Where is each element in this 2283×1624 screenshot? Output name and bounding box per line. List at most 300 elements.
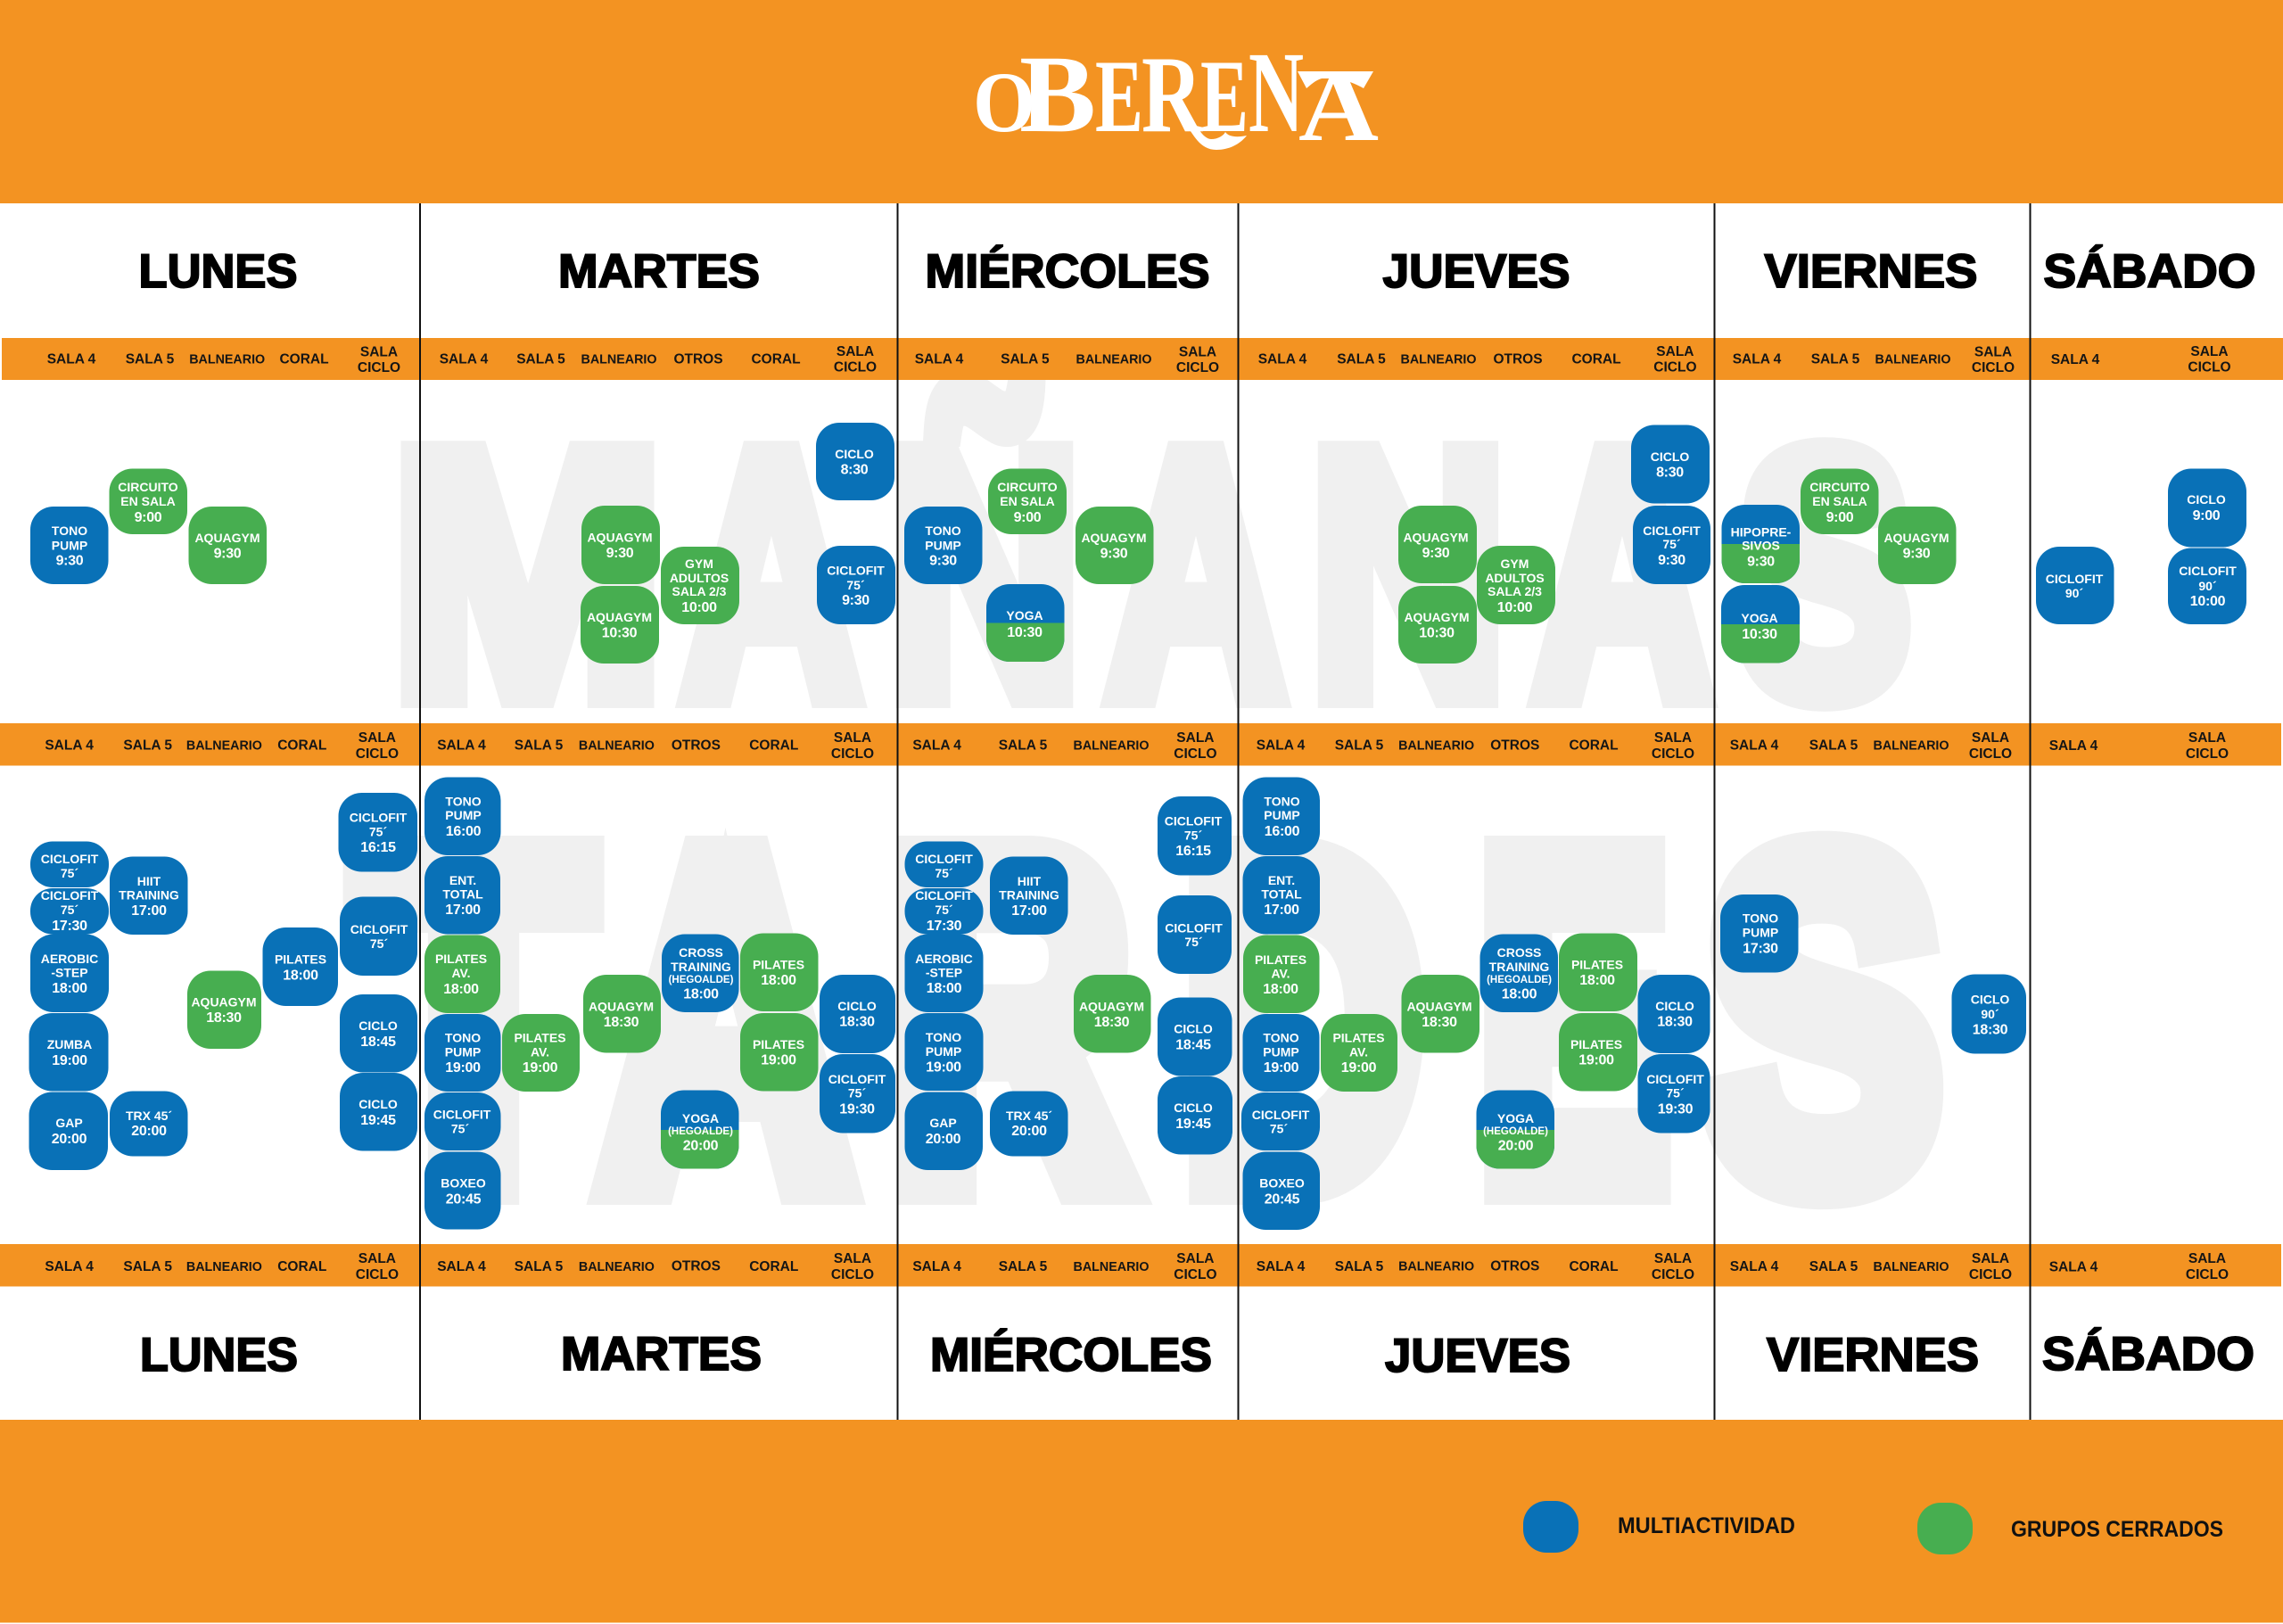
class: ciclofit 75 16:15 bbox=[1158, 796, 1232, 876]
room bar: bottom: CICLO bbox=[1652, 1267, 1694, 1282]
class: ciclofit 90 10:00: 10:00 bbox=[2190, 594, 2226, 609]
room bar: morning: OTROS bbox=[673, 351, 723, 367]
class: cross training 18:00: (HEGOALDE) bbox=[669, 975, 734, 985]
class: aquagym 9:30: AQUAGYM bbox=[1403, 530, 1469, 544]
room bar: afternoon: BALNEARIO bbox=[186, 738, 262, 753]
class: yoga hegoalde 20:00 bbox=[661, 1090, 738, 1168]
room bar: afternoon: CORAL bbox=[749, 738, 798, 753]
class: aerobic step 18:00 bbox=[30, 935, 109, 1012]
room bar: afternoon: CICLO bbox=[1174, 746, 1217, 762]
class: pilates av. 19:00 bbox=[1321, 1014, 1397, 1092]
panel: lunes classes bbox=[29, 469, 417, 1170]
class: tono pump 9:30: 9:30 bbox=[56, 553, 84, 569]
class: ciclo 9:00: 9:00 bbox=[2193, 508, 2221, 523]
class: aerobic step 18:00: AEROBIC bbox=[915, 952, 973, 966]
class: gym adultos 10:00: SALA 2/3 bbox=[1488, 584, 1542, 598]
room bar: morning: SALA 5 bbox=[1337, 351, 1386, 367]
class: ciclofit 75 19:30: CICLOFIT bbox=[828, 1072, 886, 1086]
class: aquagym 9:30: AQUAGYM bbox=[1883, 531, 1949, 545]
class: tono pump 19:00: 19:00 bbox=[926, 1059, 961, 1076]
class: ciclo 19:45: CICLO bbox=[1174, 1101, 1213, 1115]
class: circuito en sala 9:00: 9:00 bbox=[135, 510, 162, 525]
class: ciclofit 75 9:30: 75´ bbox=[846, 578, 865, 592]
class: ciclofit 75 17:30: 75´ bbox=[935, 903, 953, 917]
class: gap 20:00: 20:00 bbox=[52, 1132, 87, 1147]
room bar: morning: SALA 5 bbox=[516, 351, 565, 367]
class: aquagym 9:30: 9:30 bbox=[214, 546, 242, 562]
room bar: afternoon: SALA 4 bbox=[2049, 738, 2098, 754]
watermark: TARDES: A bbox=[601, 756, 852, 1283]
room bar: bottom: CORAL bbox=[1569, 1259, 1619, 1274]
class: pilates 18:00 bbox=[740, 933, 819, 1011]
class: tono pump 17:30: 17:30 bbox=[1743, 941, 1778, 956]
day headings: top row: VIERNES bbox=[1764, 245, 1978, 298]
room bar: morning: BALNEARIO bbox=[1076, 353, 1152, 367]
room bar: morning: CICLO bbox=[358, 360, 400, 375]
class: circuito en sala 9:00 bbox=[109, 469, 187, 534]
room bar: afternoon: CORAL bbox=[277, 738, 326, 753]
class: hipopresivos 9:30: SIVOS bbox=[1742, 539, 1780, 553]
class: aquagym 9:30: 9:30 bbox=[1100, 546, 1128, 562]
class: ciclofit 75 19:30: CICLOFIT bbox=[1646, 1072, 1704, 1086]
class: yoga hegoalde 20:00: 20:00 bbox=[683, 1138, 719, 1154]
room bar: bottom: SALA bbox=[359, 1251, 396, 1266]
class: ent. total 17:00: ENT. bbox=[1268, 873, 1295, 887]
class: ciclo 18:45: CICLO bbox=[1174, 1021, 1213, 1035]
class: ciclofit 75 17:30: 17:30 bbox=[927, 919, 962, 934]
class: hiit training 17:00: 17:00 bbox=[131, 903, 167, 919]
class: circuito en sala 9:00: 9:00 bbox=[1826, 510, 1854, 525]
room bar: bottom: SALA 4 bbox=[437, 1259, 486, 1274]
day headings: top row: MARTES bbox=[558, 245, 760, 298]
panel: miércoles classes bbox=[904, 469, 1232, 1170]
class: tono pump 17:30 bbox=[1720, 894, 1798, 972]
class: tono pump 16:00: TONO bbox=[1264, 794, 1300, 808]
class: ciclofit 75: CICLOFIT bbox=[350, 922, 408, 936]
class: aquagym 18:30: AQUAGYM bbox=[191, 995, 257, 1010]
class: ciclofit 75: CICLOFIT bbox=[1252, 1108, 1310, 1122]
class: ciclofit 75: CICLOFIT bbox=[1165, 920, 1223, 935]
class: cross training 18:00: 18:00 bbox=[1502, 986, 1537, 1002]
class: yoga 10:30: 10:30 bbox=[1007, 625, 1043, 640]
class: ciclo 19:45: 19:45 bbox=[360, 1113, 396, 1128]
class: ciclofit 75 17:30: CICLOFIT bbox=[915, 888, 973, 903]
room bar: afternoon: SALA 5 bbox=[1809, 738, 1859, 753]
class: tono pump 16:00: 16:00 bbox=[446, 824, 482, 839]
room bar: morning: SALA bbox=[1974, 344, 2012, 360]
class: tono pump 17:30: PUMP bbox=[1743, 926, 1778, 940]
room bar: bottom: OTROS bbox=[1490, 1259, 1539, 1274]
class: ciclofit 75 17:30: 75´ bbox=[61, 903, 78, 917]
class: ciclofit 75: 75´ bbox=[61, 866, 78, 880]
room bar: afternoon: SALA 5 bbox=[999, 738, 1048, 753]
watermark: MAÑANAS: A bbox=[1533, 379, 1711, 770]
room bar: afternoon: OTROS bbox=[672, 738, 721, 753]
class: tono pump 17:30: TONO bbox=[1743, 911, 1778, 926]
class: cross training 18:00: TRAINING bbox=[1489, 960, 1549, 974]
class: aquagym 18:30: 18:30 bbox=[1422, 1015, 1457, 1030]
class: aquagym 9:30: AQUAGYM bbox=[587, 530, 653, 544]
room bar: afternoon: SALA bbox=[359, 730, 396, 746]
day headings: bottom row bbox=[140, 1327, 2254, 1382]
class: trx 45 20:00 bbox=[990, 1092, 1068, 1156]
class: aerobic step 18:00: -STEP bbox=[926, 965, 962, 979]
class: ciclofit 75 9:30 bbox=[817, 546, 895, 624]
class: tono pump 9:30 bbox=[30, 507, 109, 584]
class: pilates av. 18:00: 18:00 bbox=[1263, 982, 1298, 997]
room bar: bottom: CICLO bbox=[1174, 1267, 1217, 1282]
class: ciclo 18:45 bbox=[1158, 997, 1232, 1076]
class: ent. total 17:00 bbox=[424, 856, 500, 935]
class: ciclo 18:45: 18:45 bbox=[360, 1035, 396, 1050]
class: ciclo 8:30 bbox=[1631, 425, 1710, 503]
class: ciclofit 75 16:15: 16:15 bbox=[1175, 844, 1211, 859]
room bar: bottom: SALA 4 bbox=[2049, 1259, 2098, 1275]
room bar: morning: CICLO bbox=[1176, 360, 1219, 375]
class: aquagym 18:30: 18:30 bbox=[206, 1010, 242, 1026]
room bar: afternoon: SALA 4 bbox=[912, 738, 961, 753]
class: ciclo 9:00 bbox=[2168, 469, 2246, 548]
class: ciclofit 75 9:30: CICLOFIT bbox=[827, 564, 885, 578]
room bar: afternoon: CICLO bbox=[2186, 746, 2229, 762]
room bar: morning bbox=[2, 338, 2283, 380]
room bar: afternoon: SALA bbox=[834, 730, 871, 746]
class: pilates av. 19:00: PILATES bbox=[1332, 1031, 1385, 1045]
class: cross training 18:00 bbox=[662, 935, 738, 1012]
room bar: bottom: OTROS bbox=[672, 1259, 721, 1274]
room bar: afternoon: SALA 4 bbox=[45, 738, 94, 753]
room bar: bottom: SALA 5 bbox=[1809, 1259, 1859, 1274]
class: hiit training 17:00: HIIT bbox=[137, 874, 161, 888]
class: boxeo 20:45 bbox=[1243, 1152, 1320, 1230]
class: ciclo 90 18:30: CICLO bbox=[1971, 993, 2009, 1007]
room bar: bottom: CICLO bbox=[1969, 1267, 2012, 1282]
class: aquagym 18:30: 18:30 bbox=[1094, 1015, 1130, 1030]
class: pilates 18:00: 18:00 bbox=[761, 973, 796, 988]
class: ciclofit 75 bbox=[1241, 1092, 1320, 1150]
class: yoga hegoalde 20:00 bbox=[1477, 1090, 1554, 1168]
class: aerobic step 18:00 bbox=[904, 935, 983, 1012]
class: cross training 18:00: CROSS bbox=[679, 945, 723, 960]
class: pilates 18:00: PILATES bbox=[753, 958, 804, 972]
class: pilates 18:00 bbox=[262, 927, 338, 1006]
class: ciclo 19:45: 19:45 bbox=[1175, 1117, 1211, 1132]
room bar: bottom: SALA bbox=[1972, 1251, 2009, 1266]
room bar: morning: CORAL bbox=[279, 351, 329, 367]
room bar: bottom: SALA 5 bbox=[999, 1259, 1048, 1274]
class: gym adultos 10:00: 10:00 bbox=[1497, 600, 1533, 615]
class: pilates av. 18:00: AV. bbox=[451, 966, 471, 980]
panel: martes classes bbox=[424, 423, 895, 1229]
class: tono pump 19:00: 19:00 bbox=[445, 1060, 481, 1076]
column divider lines bbox=[420, 203, 2030, 1420]
class: pilates av. 19:00 bbox=[502, 1014, 580, 1092]
class: pilates av. 18:00 bbox=[1243, 935, 1320, 1013]
room bar: morning: CICLO bbox=[2188, 360, 2231, 375]
class: zumba 19:00: ZUMBA bbox=[47, 1037, 92, 1051]
class: ciclofit 75 bbox=[904, 842, 983, 887]
class: ciclofit 75 16:15 bbox=[339, 793, 417, 872]
room bar: afternoon: BALNEARIO bbox=[1873, 738, 1949, 753]
class: ciclofit 75 16:15: 75´ bbox=[1184, 828, 1202, 842]
class: tono pump 16:00: PUMP bbox=[445, 808, 482, 822]
class: hipopresivos 9:30: HIPOPRE- bbox=[1731, 524, 1792, 539]
class: aquagym 10:30: AQUAGYM bbox=[587, 610, 652, 624]
class: cross training 18:00: (HEGOALDE) bbox=[1487, 975, 1552, 985]
room bar: afternoon: SALA 4 bbox=[1730, 738, 1779, 753]
room bar: bottom: SALA bbox=[1176, 1251, 1215, 1266]
class: ciclo 18:30: CICLO bbox=[837, 999, 877, 1013]
class: gym adultos 10:00 bbox=[661, 547, 739, 624]
class: tono pump 19:00: TONO bbox=[445, 1031, 481, 1045]
class: pilates av. 19:00: 19:00 bbox=[1341, 1060, 1377, 1076]
watermark: TARDES: D bbox=[1183, 756, 1422, 1283]
room bar: morning: SALA 4 bbox=[440, 351, 489, 367]
class: aquagym 10:30: 10:30 bbox=[602, 626, 638, 640]
class: ciclofit 90 10:00: 90´ bbox=[2198, 579, 2217, 593]
room bar: afternoon: CICLO bbox=[1969, 746, 2012, 762]
class: ciclo 18:30 bbox=[1637, 975, 1710, 1053]
room bar: afternoon: SALA 5 bbox=[1335, 738, 1384, 753]
class: trx 45 20:00: TRX 45´ bbox=[126, 1109, 172, 1123]
room bar: afternoon: SALA bbox=[1972, 730, 2009, 746]
room bar: bottom: SALA bbox=[834, 1251, 871, 1266]
header band with logo bbox=[0, 0, 2283, 203]
watermark: TARDES: E bbox=[1479, 756, 1669, 1283]
class: trx 45 20:00: TRX 45´ bbox=[1006, 1109, 1052, 1123]
room bar: bottom: SALA 5 bbox=[1335, 1259, 1384, 1274]
logo: OBERENA: A bbox=[1298, 52, 1379, 162]
class: tono pump 19:00 bbox=[1243, 1014, 1320, 1092]
class: ciclo 19:45 bbox=[340, 1073, 417, 1150]
class: gap 20:00: 20:00 bbox=[926, 1132, 961, 1147]
class: ent. total 17:00: 17:00 bbox=[445, 903, 481, 918]
class: pilates 18:00: PILATES bbox=[1571, 958, 1623, 972]
class: boxeo 20:45: 20:45 bbox=[1265, 1191, 1300, 1208]
room bar: afternoon bbox=[0, 723, 2281, 765]
class: tono pump 19:00: PUMP bbox=[445, 1045, 481, 1059]
class: pilates av. 18:00: 18:00 bbox=[443, 982, 479, 997]
room bar: afternoon: SALA bbox=[1176, 730, 1215, 746]
class: pilates av. 19:00: PILATES bbox=[514, 1031, 566, 1045]
class: ciclo 18:30: 18:30 bbox=[839, 1015, 875, 1029]
class: tono pump 9:30: TONO bbox=[925, 523, 961, 538]
room bar: morning: SALA bbox=[837, 344, 874, 359]
class: aquagym 18:30: 18:30 bbox=[604, 1015, 639, 1030]
room bar: morning: CORAL bbox=[1571, 351, 1621, 367]
class: tono pump 16:00 bbox=[424, 778, 501, 855]
logo: OBERENA: N bbox=[1249, 29, 1304, 157]
class: gap 20:00 bbox=[29, 1092, 108, 1170]
class: gym adultos 10:00 bbox=[1477, 546, 1555, 624]
class: pilates 18:00: 18:00 bbox=[1579, 973, 1615, 988]
class: aquagym 9:30 bbox=[1878, 507, 1957, 584]
class: aquagym 18:30 bbox=[187, 970, 261, 1049]
room bar: afternoon: OTROS bbox=[1490, 738, 1539, 753]
class: ciclofit 75 bbox=[30, 842, 109, 887]
class: ciclofit 75 17:30: CICLOFIT bbox=[41, 888, 99, 903]
class: aquagym 9:30 bbox=[189, 507, 267, 584]
class: cross training 18:00: TRAINING bbox=[671, 960, 731, 974]
class: hipopresivos 9:30 bbox=[1721, 505, 1800, 583]
class: pilates av. 19:00: AV. bbox=[1349, 1045, 1368, 1059]
class: ciclofit 75: CICLOFIT bbox=[915, 852, 973, 866]
class: tono pump 19:00: TONO bbox=[1263, 1031, 1299, 1045]
class: ciclofit 90 10:00 bbox=[2168, 548, 2246, 624]
class: circuito en sala 9:00: 9:00 bbox=[1014, 510, 1042, 525]
class: pilates 19:00: PILATES bbox=[1570, 1037, 1622, 1051]
class: zumba 19:00: 19:00 bbox=[52, 1053, 87, 1068]
room bar: bottom: CICLO bbox=[2186, 1267, 2229, 1282]
class: ciclofit 75 16:15: 16:15 bbox=[360, 840, 396, 855]
class: tono pump 9:30: PUMP bbox=[925, 539, 961, 553]
class: aquagym 9:30: AQUAGYM bbox=[1081, 531, 1147, 545]
class: aquagym 10:30: 10:30 bbox=[1419, 626, 1455, 640]
room bar: bottom: SALA 4 bbox=[1730, 1259, 1779, 1274]
class: ent. total 17:00: ENT. bbox=[449, 873, 476, 887]
class: tono pump 19:00 bbox=[424, 1014, 501, 1092]
class: ciclofit 75 9:30: 9:30 bbox=[842, 593, 870, 608]
room bar: bottom: CORAL bbox=[749, 1259, 798, 1274]
room bar: afternoon: SALA 5 bbox=[123, 738, 172, 753]
watermark: MAÑANAS: N bbox=[1310, 379, 1506, 770]
class: pilates 19:00 bbox=[740, 1013, 819, 1092]
day headings: top row: SÁBADO bbox=[2044, 244, 2256, 298]
class: trx 45 20:00: 20:00 bbox=[131, 1124, 167, 1139]
day headings: bottom row: MIÉRCOLES bbox=[930, 1328, 1212, 1381]
logo: OBERENA: E bbox=[1200, 39, 1249, 154]
class: pilates av. 18:00: PILATES bbox=[1255, 952, 1306, 967]
class: aquagym 10:30 bbox=[581, 586, 659, 664]
room bar: morning: SALA 4 bbox=[2051, 352, 2100, 367]
room bar: afternoon: CORAL bbox=[1569, 738, 1619, 753]
class: ciclofit 75 17:30 bbox=[30, 888, 109, 935]
class: ciclo 8:30 bbox=[816, 423, 894, 500]
class: aquagym 9:30: 9:30 bbox=[606, 546, 634, 561]
legend: multiactividad: MULTIACTIVIDAD bbox=[1618, 1513, 1795, 1538]
class: ciclo 18:30: 18:30 bbox=[1657, 1015, 1693, 1029]
room bar: morning: BALNEARIO bbox=[1400, 353, 1477, 367]
room bar: morning: BALNEARIO bbox=[581, 353, 656, 367]
room bar: morning: SALA 4 bbox=[1733, 351, 1782, 367]
class: ciclofit 75: 75´ bbox=[451, 1122, 469, 1136]
room bar: morning: CORAL bbox=[751, 351, 801, 367]
watermark: MAÑANAS: M bbox=[391, 379, 663, 770]
class: zumba 19:00 bbox=[29, 1013, 109, 1092]
class: ciclofit 75: 75´ bbox=[935, 866, 953, 880]
room bar: morning: BALNEARIO bbox=[1875, 353, 1951, 367]
class: ciclofit 75: CICLOFIT bbox=[41, 852, 99, 866]
day headings: top row: MIÉRCOLES bbox=[926, 244, 1209, 298]
class: tono pump 9:30 bbox=[904, 507, 983, 584]
class: ciclofit 75 19:30 bbox=[820, 1054, 895, 1133]
class: yoga hegoalde 20:00: 20:00 bbox=[1498, 1138, 1534, 1154]
room bar: bottom: CICLO bbox=[831, 1267, 874, 1282]
class: hiit training 17:00: TRAINING bbox=[999, 888, 1059, 903]
class: ent. total 17:00: TOTAL bbox=[442, 886, 483, 901]
class: ciclofit 75: 75´ bbox=[1270, 1122, 1288, 1136]
class: cross training 18:00: CROSS bbox=[1497, 945, 1541, 960]
class: yoga 10:30: 10:30 bbox=[1742, 627, 1777, 642]
class: ciclo 90 18:30 bbox=[1951, 974, 2026, 1054]
panel: sábado classes bbox=[2036, 469, 2246, 624]
legend: multiactividad bbox=[1523, 1501, 1795, 1553]
class: pilates 19:00: PILATES bbox=[753, 1037, 804, 1051]
class: ciclo 18:45: 18:45 bbox=[1175, 1038, 1211, 1052]
class: yoga 10:30 bbox=[986, 584, 1065, 662]
class: yoga 10:30: YOGA bbox=[1741, 611, 1778, 625]
class: ciclo 8:30: CICLO bbox=[1651, 449, 1689, 464]
class: pilates 19:00 bbox=[1559, 1013, 1637, 1092]
class: ciclofit 75 9:30: 9:30 bbox=[1658, 553, 1685, 568]
class: cross training 18:00 bbox=[1480, 935, 1558, 1012]
logo: OBERENA: B bbox=[1019, 33, 1096, 155]
class: ciclofit 75 9:30 bbox=[1633, 506, 1710, 584]
class: aquagym 9:30: AQUAGYM bbox=[194, 531, 260, 545]
class: tono pump 19:00: PUMP bbox=[926, 1044, 961, 1059]
class: pilates av. 19:00: 19:00 bbox=[523, 1060, 558, 1076]
room bar: morning: SALA bbox=[360, 344, 398, 360]
class: trx 45 20:00 bbox=[110, 1092, 187, 1156]
room bar: bottom: BALNEARIO bbox=[579, 1260, 655, 1274]
class: gym adultos 10:00: ADULTOS bbox=[1485, 571, 1545, 585]
class: ciclofit 75 16:15: CICLOFIT bbox=[350, 811, 408, 825]
class: ciclo 90 18:30: 18:30 bbox=[1973, 1022, 2008, 1038]
class: yoga hegoalde 20:00: (HEGOALDE) bbox=[1483, 1126, 1548, 1137]
watermark: MAÑANAS: A bbox=[1107, 379, 1285, 770]
room bar: morning: SALA 5 bbox=[1001, 351, 1050, 367]
class: aquagym 10:30: AQUAGYM bbox=[1404, 610, 1470, 624]
class: pilates 18:00: 18:00 bbox=[283, 969, 318, 983]
room bar: bottom: CICLO bbox=[356, 1267, 399, 1282]
class: circuito en sala 9:00: EN SALA bbox=[1000, 494, 1055, 508]
day headings: bottom row: MARTES bbox=[561, 1328, 762, 1381]
class: ciclofit 75: 75´ bbox=[370, 936, 388, 951]
class: gym adultos 10:00: 10:00 bbox=[681, 600, 717, 615]
class: tono pump 19:00: TONO bbox=[926, 1030, 961, 1044]
room bar: bottom: SALA bbox=[2188, 1251, 2226, 1266]
class: ciclofit 90 bbox=[2036, 547, 2114, 624]
room bar: afternoon: SALA bbox=[1654, 730, 1692, 746]
room bar: afternoon: SALA 4 bbox=[1257, 738, 1306, 753]
logo: OBERENA bbox=[973, 29, 1379, 162]
room bar: bottom: SALA 4 bbox=[45, 1259, 94, 1274]
class: ciclo 8:30: 8:30 bbox=[1656, 466, 1684, 480]
class: tono pump 16:00: TONO bbox=[445, 794, 482, 808]
room bar: afternoon: BALNEARIO bbox=[1074, 738, 1149, 753]
room bar: morning: SALA 4 bbox=[47, 351, 96, 367]
class: pilates 18:00 bbox=[1559, 933, 1637, 1011]
room bar: morning: CICLO bbox=[1653, 360, 1697, 375]
class: ciclo 19:45 bbox=[1158, 1076, 1232, 1154]
watermark: MAÑANAS: A bbox=[682, 379, 861, 770]
room bar: bottom: SALA 5 bbox=[515, 1259, 564, 1274]
class: tono pump 9:30: PUMP bbox=[52, 539, 87, 553]
class: gym adultos 10:00: SALA 2/3 bbox=[672, 584, 727, 598]
class: gym adultos 10:00: ADULTOS bbox=[670, 571, 729, 585]
footer band with legend bbox=[0, 1420, 2283, 1623]
class: tono pump 16:00 bbox=[1243, 778, 1320, 855]
room bar: morning: BALNEARIO bbox=[189, 353, 265, 367]
class: circuito en sala 9:00: CIRCUITO bbox=[1809, 480, 1870, 494]
class: ciclofit 75 bbox=[1158, 895, 1232, 974]
room bar: afternoon: CICLO bbox=[356, 746, 399, 762]
class: ciclo 19:45: CICLO bbox=[359, 1097, 398, 1111]
day headings: bottom row: VIERNES bbox=[1767, 1329, 1979, 1381]
day headings: top row: LUNES bbox=[139, 245, 298, 298]
logo: OBERENA: R bbox=[1142, 33, 1203, 155]
class: aquagym 9:30 bbox=[1398, 506, 1477, 583]
